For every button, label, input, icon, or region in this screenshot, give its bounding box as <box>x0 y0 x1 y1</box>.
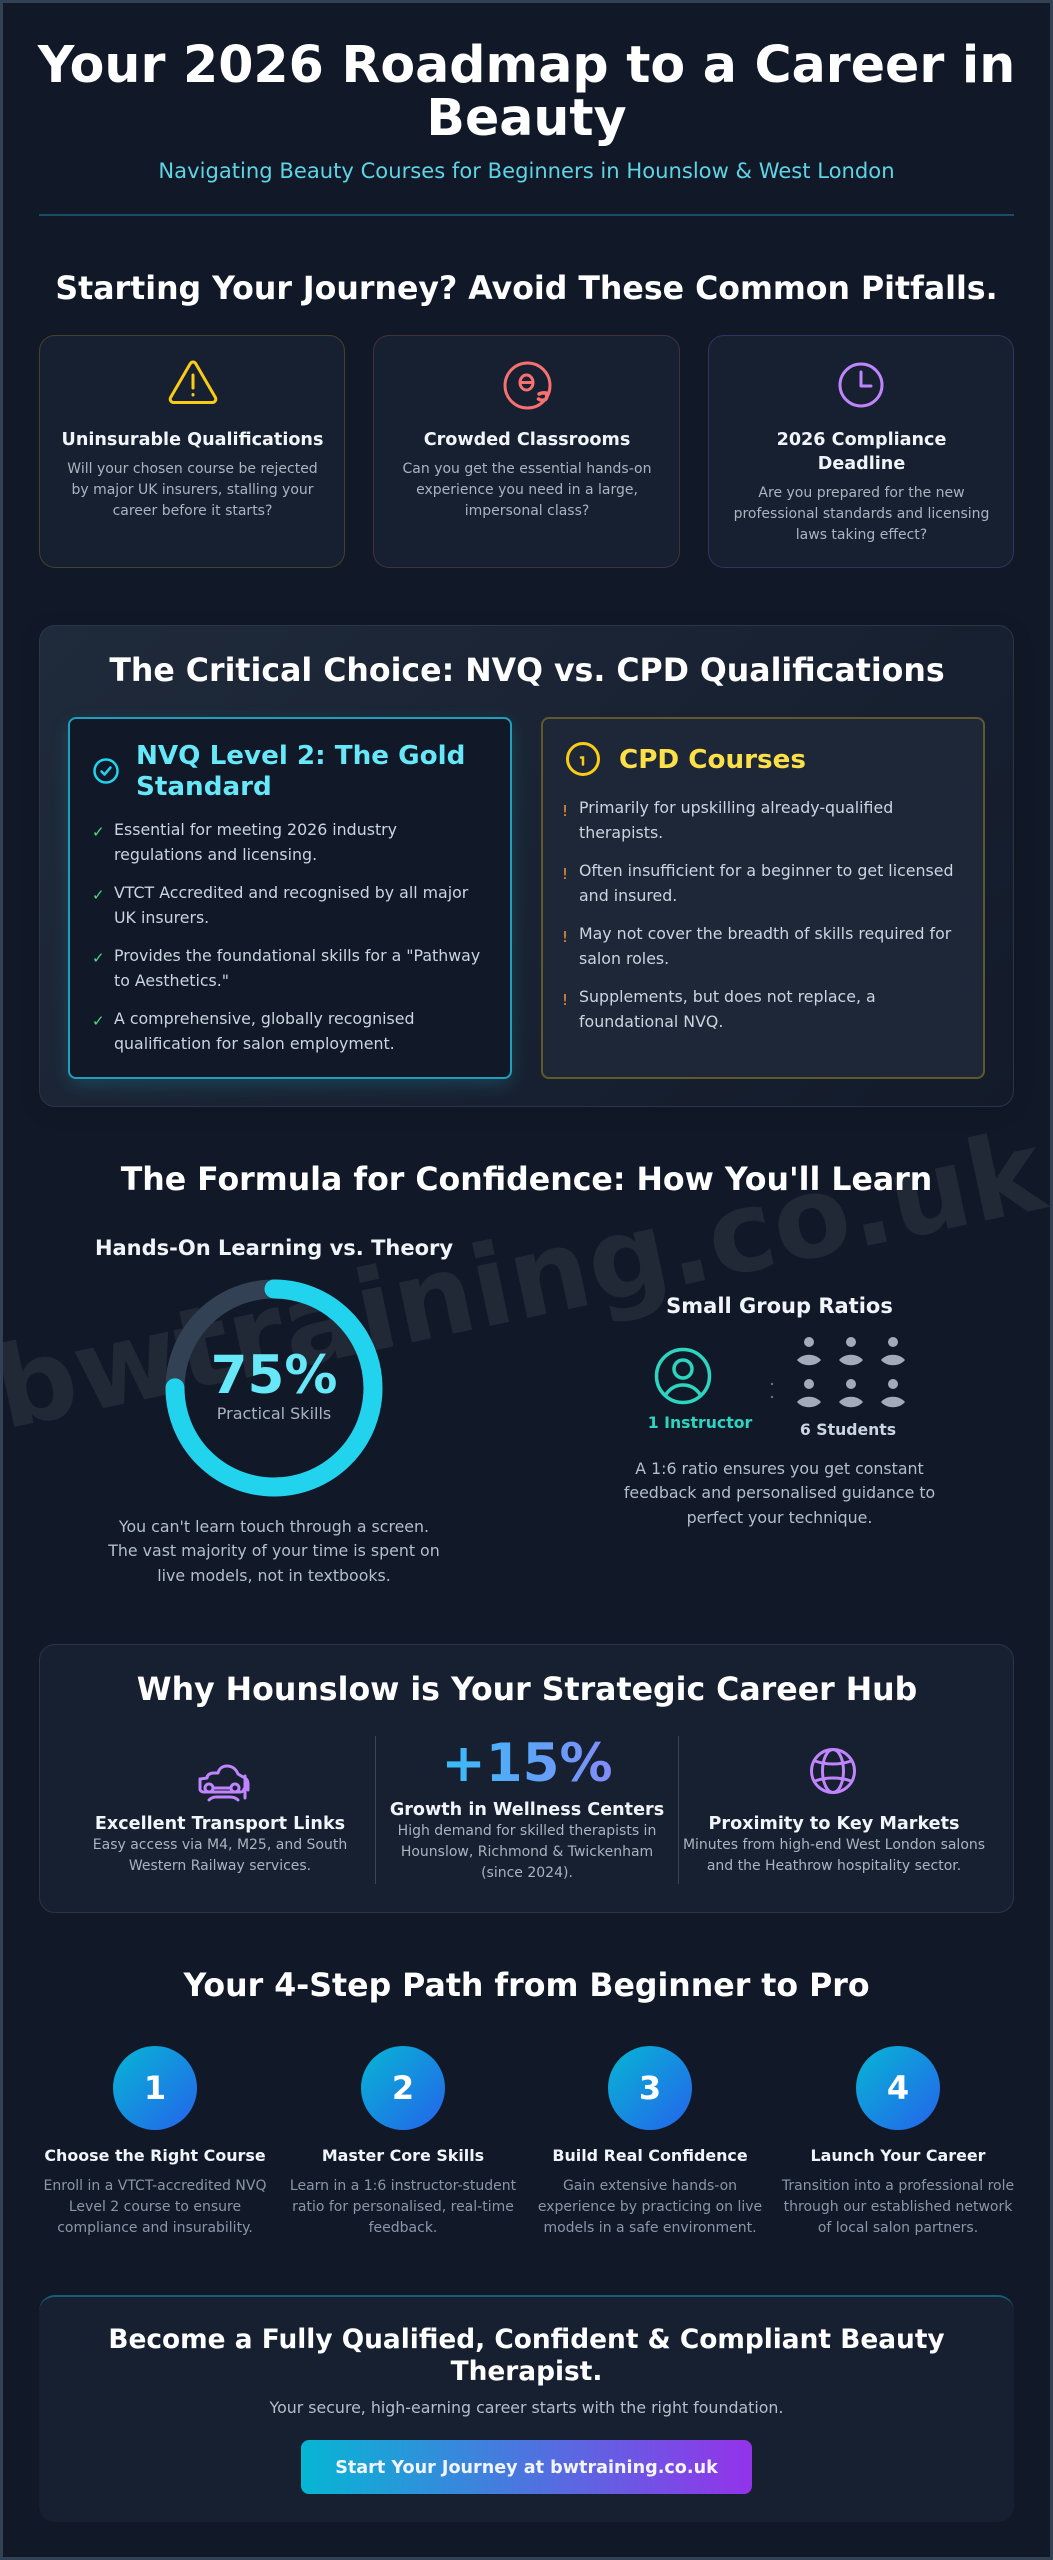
NVQ list: ✓ <box>92 949 105 967</box>
step 1 text: compliance and insurability. <box>57 2220 253 2236</box>
panel: NVQ <box>68 717 512 1079</box>
heading: steps: Your 4-Step Path from Beginner to Pro <box>183 1968 870 2004</box>
icon: check circle <box>93 758 119 784</box>
step 3 text: experience by practicing on live <box>538 2199 762 2215</box>
subheading: small group: Small Group Ratios <box>666 1294 893 1318</box>
heading: pitfalls: Starting Your Journey? Avoid These Common Pitfalls. <box>55 271 998 307</box>
step 2 text: feedback. <box>369 2220 437 2236</box>
card text: experience you need in a large, <box>416 482 638 498</box>
CPD list: foundational NVQ. <box>579 1012 723 1031</box>
hands-on text: live models, not in textbooks. <box>157 1566 391 1584</box>
small group text: perfect your technique. <box>687 1508 872 1526</box>
check marks: ✓ <box>92 823 105 841</box>
step 4 number <box>856 2046 940 2130</box>
chart: 75% donut <box>166 1280 382 1496</box>
CPD list: Often insufficient for a beginner to get licensed <box>579 861 953 880</box>
card text <box>734 485 989 543</box>
ratio colon <box>770 1382 774 1398</box>
step 1 number: 1 <box>144 2069 166 2107</box>
step 4 title: Launch Your Career <box>810 2146 986 2165</box>
CTA heading: Become a Fully Qualified, Confident & Compliant Beauty <box>108 2324 945 2355</box>
column: transport <box>93 1764 347 1874</box>
CTA button <box>301 2440 752 2494</box>
small group text: A 1:6 ratio ensures you get constant <box>635 1458 924 1478</box>
step 4 text: of local salon partners. <box>818 2220 978 2236</box>
markets text: Minutes from high-end West London salons <box>683 1837 985 1853</box>
NVQ list: Essential for meeting 2026 industry <box>114 820 397 839</box>
card text <box>67 461 318 519</box>
growth text: Hounslow, Richmond & Twickenham <box>401 1844 653 1860</box>
CPD list: May not cover the breadth of skills required for <box>579 924 951 943</box>
CPD list: ! <box>562 802 568 820</box>
transport text: Easy access via M4, M25, and South <box>93 1837 347 1853</box>
column: markets <box>683 1748 985 1874</box>
hands-on text: The vast majority of your time is spent on <box>108 1541 440 1560</box>
watermark: bwtraining.co.uk <box>0 1106 1053 1455</box>
CPD list: ! <box>562 928 568 946</box>
step 2 text <box>290 2178 516 2236</box>
growth text: (since 2024). <box>481 1865 573 1881</box>
step 2 title: Master Core Skills <box>322 2146 484 2165</box>
panel: crowded classrooms <box>373 335 680 568</box>
CPD list <box>562 798 953 1031</box>
panel: uninsurable qualifications <box>39 335 345 568</box>
students label: 6 Students <box>800 1420 896 1439</box>
transport text <box>93 1837 347 1874</box>
NVQ list: VTCT Accredited and recognised by all major <box>114 883 468 902</box>
panel: CPD <box>541 717 985 1079</box>
hands-on text: You can't learn touch through a screen. <box>119 1516 429 1536</box>
card title: 2026 Compliance <box>777 430 946 450</box>
card text: impersonal class? <box>465 503 589 519</box>
CTA heading: Therapist. <box>451 2356 602 2387</box>
card text: laws taking effect? <box>796 527 927 543</box>
growth text: High demand for skilled therapists in <box>398 1823 656 1839</box>
CPD list: salon roles. <box>579 949 669 968</box>
donut value: 75% <box>211 1345 337 1406</box>
card text: Are you prepared for the new <box>758 485 965 501</box>
small group text <box>624 1458 935 1526</box>
step 2 number <box>361 2046 445 2130</box>
NVQ list: regulations and licensing. <box>114 845 317 864</box>
title <box>37 35 1015 146</box>
heading: formula: The Formula for Confidence: How You'll Learn <box>121 1162 932 1198</box>
CPD list: Primarily for upskilling already-qualified <box>579 798 893 817</box>
small group text: feedback and personalised guidance to <box>624 1483 935 1502</box>
transport text: Western Railway services. <box>129 1858 311 1874</box>
step 3 text: Gain extensive hands-on <box>563 2178 737 2194</box>
heading: Hounslow: Why Hounslow is Your Strategic Career Hub <box>137 1672 917 1708</box>
step 4 text: Transition into a professional role <box>782 2178 1014 2194</box>
panel: call to action <box>39 2295 1014 2522</box>
icon: clock <box>838 362 884 408</box>
icon: globe <box>810 1748 856 1794</box>
step 1 text <box>44 2178 266 2236</box>
stat: +15%: +15% <box>441 1733 613 1794</box>
NVQ list <box>92 820 480 1053</box>
markets text: and the Heathrow hospitality sector. <box>707 1858 961 1874</box>
panel: compliance deadline <box>708 335 1014 568</box>
header divider <box>39 214 1014 216</box>
CTA button: Start Your Journey at bwtraining.co.uk <box>335 2458 718 2478</box>
step 2 text: Learn in a 1:6 instructor-student <box>290 2178 516 2194</box>
markets title: Proximity to Key Markets <box>709 1814 959 1834</box>
card title <box>777 430 946 474</box>
step 3 number: 3 <box>639 2069 661 2107</box>
step 1 text: Enroll in a VTCT-accredited NVQ <box>44 2178 266 2194</box>
NVQ list: UK insurers. <box>114 908 209 927</box>
instructor label: 1 Instructor <box>648 1413 752 1432</box>
NVQ heading: Standard <box>136 772 272 802</box>
title: Your 2026 Roadmap to a Career in <box>38 35 1015 94</box>
card text: by major UK insurers, stalling your <box>71 482 314 498</box>
icon: info circle <box>566 742 600 776</box>
icon: car and train <box>198 1764 250 1802</box>
step 2 number: 2 <box>392 2069 414 2107</box>
step 1 title: Choose the Right Course <box>44 2146 266 2165</box>
donut label: Practical Skills <box>217 1404 331 1423</box>
NVQ list: A comprehensive, globally recognised <box>114 1009 414 1028</box>
NVQ list: to Aesthetics." <box>114 971 229 990</box>
step 2 text: ratio for personalised, real-time <box>292 2199 514 2215</box>
NVQ heading: NVQ Level 2: The Gold <box>136 741 465 771</box>
step 4 text <box>782 2178 1014 2236</box>
growth text <box>398 1823 656 1881</box>
icon: instructor <box>654 1348 712 1404</box>
NVQ list: Provides the foundational skills for a "Pathway <box>114 946 480 965</box>
step 4 text: through our established network <box>784 2199 1012 2215</box>
hands-on text <box>108 1516 440 1584</box>
NVQ list: ✓ <box>92 1012 105 1030</box>
CPD list: therapists. <box>579 823 663 842</box>
step 4 number: 4 <box>887 2069 909 2107</box>
step 3 number <box>608 2046 692 2130</box>
NVQ heading <box>136 741 465 802</box>
column divider <box>678 1736 679 1884</box>
card title: Crowded Classrooms <box>424 430 630 450</box>
card title: Uninsurable Qualifications <box>62 430 323 450</box>
CPD list: ! <box>562 991 568 1009</box>
CPD list: Supplements, but does not replace, a <box>579 987 876 1006</box>
title: Beauty <box>426 88 627 146</box>
NVQ list: qualification for salon employment. <box>114 1034 395 1053</box>
subheading: hands-on: Hands-On Learning vs. Theory <box>95 1236 453 1260</box>
card text: professional standards and licensing <box>734 506 989 522</box>
column divider <box>375 1736 376 1884</box>
step 3 text: models in a safe environment. <box>543 2220 757 2236</box>
icon: six students <box>797 1337 905 1408</box>
step 1 text: Level 2 course to ensure <box>69 2199 241 2215</box>
CPD list: ! <box>562 865 568 883</box>
CPD list: and insured. <box>579 886 677 905</box>
card text: Can you get the essential hands-on <box>403 461 651 477</box>
card title: Deadline <box>818 454 905 474</box>
panel: critical choice <box>39 625 1014 1107</box>
NVQ list: ✓ <box>92 886 105 904</box>
CTA text: Your secure, high-earning career starts with the right foundation. <box>270 2398 783 2417</box>
icon: warning triangle <box>168 360 218 404</box>
column: growth <box>390 1733 664 1881</box>
step 3 text <box>538 2178 762 2236</box>
card text: career before it starts? <box>113 503 272 519</box>
step 1 number <box>113 2046 197 2130</box>
markets text <box>683 1837 985 1874</box>
panel: Hounslow hub <box>39 1644 1014 1913</box>
icon: crowded person circle <box>504 362 552 410</box>
heading: NVQ vs CPD: The Critical Choice: NVQ vs. CPD Qualifications <box>109 653 945 689</box>
subtitle: Navigating Beauty Courses for Beginners in Hounslow & West London <box>158 158 895 183</box>
CPD heading: CPD Courses <box>619 745 806 775</box>
step 3 title: Build Real Confidence <box>552 2146 748 2165</box>
CTA heading <box>108 2324 945 2387</box>
transport title: Excellent Transport Links <box>95 1814 345 1834</box>
card text: Will your chosen course be rejected <box>67 461 318 477</box>
card text <box>403 461 651 519</box>
growth title: Growth in Wellness Centers <box>390 1800 664 1820</box>
